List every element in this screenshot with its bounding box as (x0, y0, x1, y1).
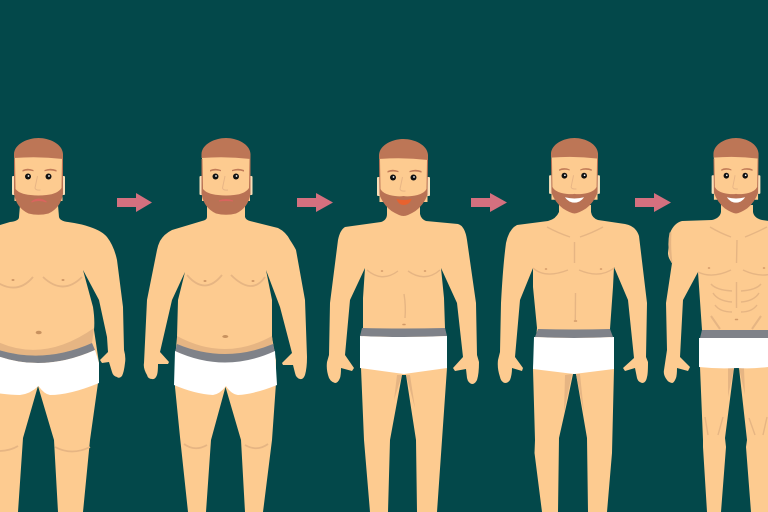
figure 3 (327, 139, 479, 512)
head (377, 139, 430, 216)
arrow 4 (635, 193, 671, 212)
navel (222, 335, 228, 338)
navel (36, 331, 42, 334)
body (144, 205, 307, 512)
chest lines (0, 277, 82, 288)
underwear (699, 338, 768, 368)
arrow 2 (297, 193, 333, 212)
underwear (533, 337, 614, 374)
arrow 1 (117, 193, 152, 212)
body (498, 205, 648, 512)
arrow 3 (471, 193, 507, 212)
ab line (404, 294, 405, 318)
underwear (0, 350, 99, 395)
inner thigh shadows (394, 375, 415, 408)
waistband (700, 330, 768, 338)
inner thigh shadows (564, 374, 584, 413)
body (664, 205, 768, 512)
nipples (204, 280, 254, 282)
figure 2 (144, 138, 307, 512)
head (549, 138, 600, 213)
abdominal muscle lines (711, 282, 761, 312)
nipples and navel (708, 268, 764, 320)
waistband (0, 343, 95, 363)
chest lines (187, 275, 265, 286)
head (12, 138, 65, 215)
underwear (360, 336, 447, 374)
belly fold (177, 336, 273, 355)
figure 4 (498, 138, 648, 512)
body (0, 205, 125, 512)
chest lines (367, 270, 440, 277)
waistband (360, 328, 447, 337)
inner thigh shadows (728, 368, 745, 397)
nipples and navel (382, 271, 426, 324)
knee lines (184, 444, 268, 448)
body (327, 205, 479, 512)
figure 5: muscular stage (664, 138, 768, 512)
chest lines (533, 227, 614, 274)
belly fold (0, 328, 94, 356)
ab line (574, 293, 576, 320)
chest lines (698, 227, 768, 275)
knee lines (705, 417, 767, 435)
hip lines (711, 316, 761, 329)
waistband (175, 344, 275, 364)
knee lines (0, 446, 90, 452)
nipples (12, 279, 64, 281)
underwear (174, 351, 277, 395)
deltoid shadow (669, 233, 672, 263)
head (200, 138, 252, 215)
nipples and navel (546, 269, 602, 321)
head (712, 138, 760, 213)
waistband (535, 329, 613, 338)
figure 1: heaviest stage (0, 138, 125, 512)
